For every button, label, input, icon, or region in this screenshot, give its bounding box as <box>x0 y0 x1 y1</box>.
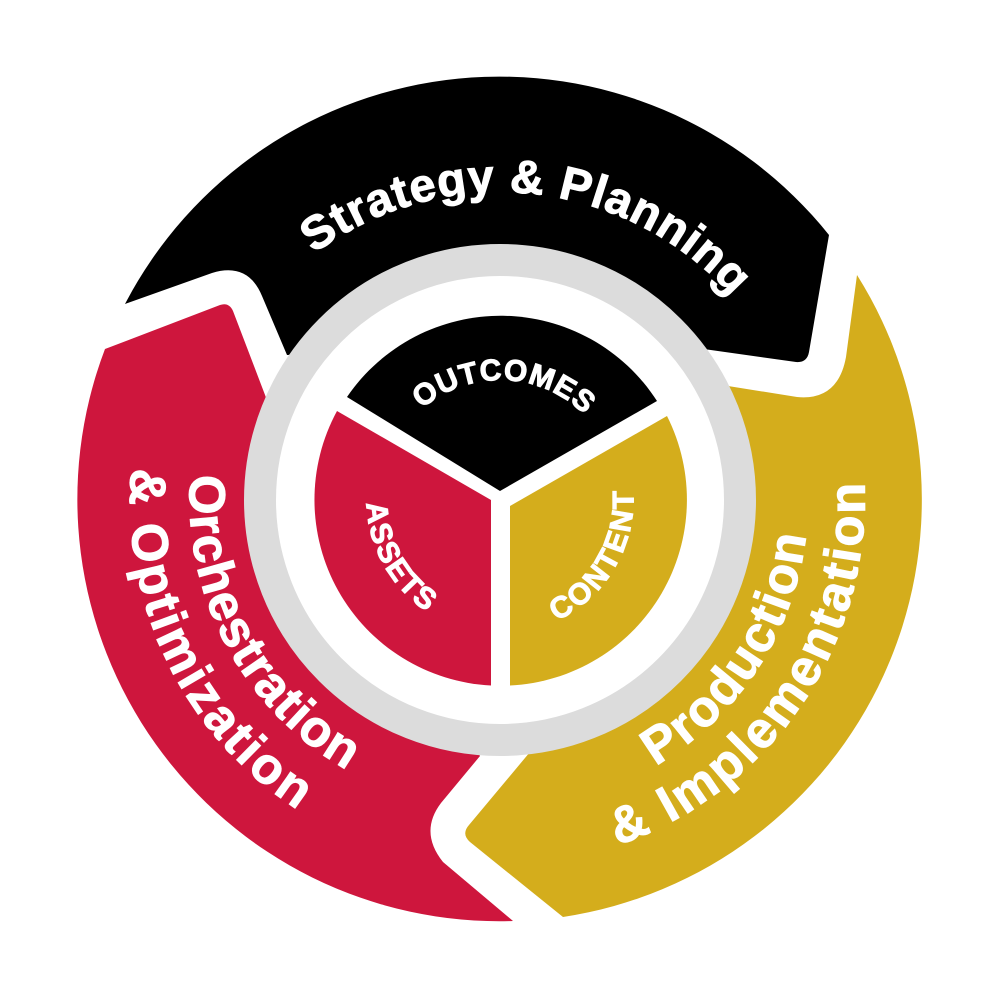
heading: production and implementation: & Implementation <box>614 485 866 843</box>
gray ring <box>260 260 740 740</box>
label: outcomes: OUTCOMES <box>414 358 595 412</box>
heading: orchestration and optimization: Orchestration <box>188 476 356 770</box>
segment: outcomes <box>347 316 657 491</box>
segment: assets <box>314 411 491 686</box>
heading: strategy and planning: Strategy & Planning <box>300 160 748 298</box>
label: content: CONTENT <box>550 490 634 618</box>
heading: production and implementation: Production <box>638 535 806 766</box>
segment: content <box>510 416 687 686</box>
panel: strategy and planning <box>125 76 829 362</box>
panel: production and implementation <box>465 275 922 917</box>
panel: orchestration and optimization <box>77 304 513 922</box>
label: assets: ASSETS <box>366 503 436 610</box>
heading: orchestration and optimization: & Optimization <box>126 470 308 809</box>
